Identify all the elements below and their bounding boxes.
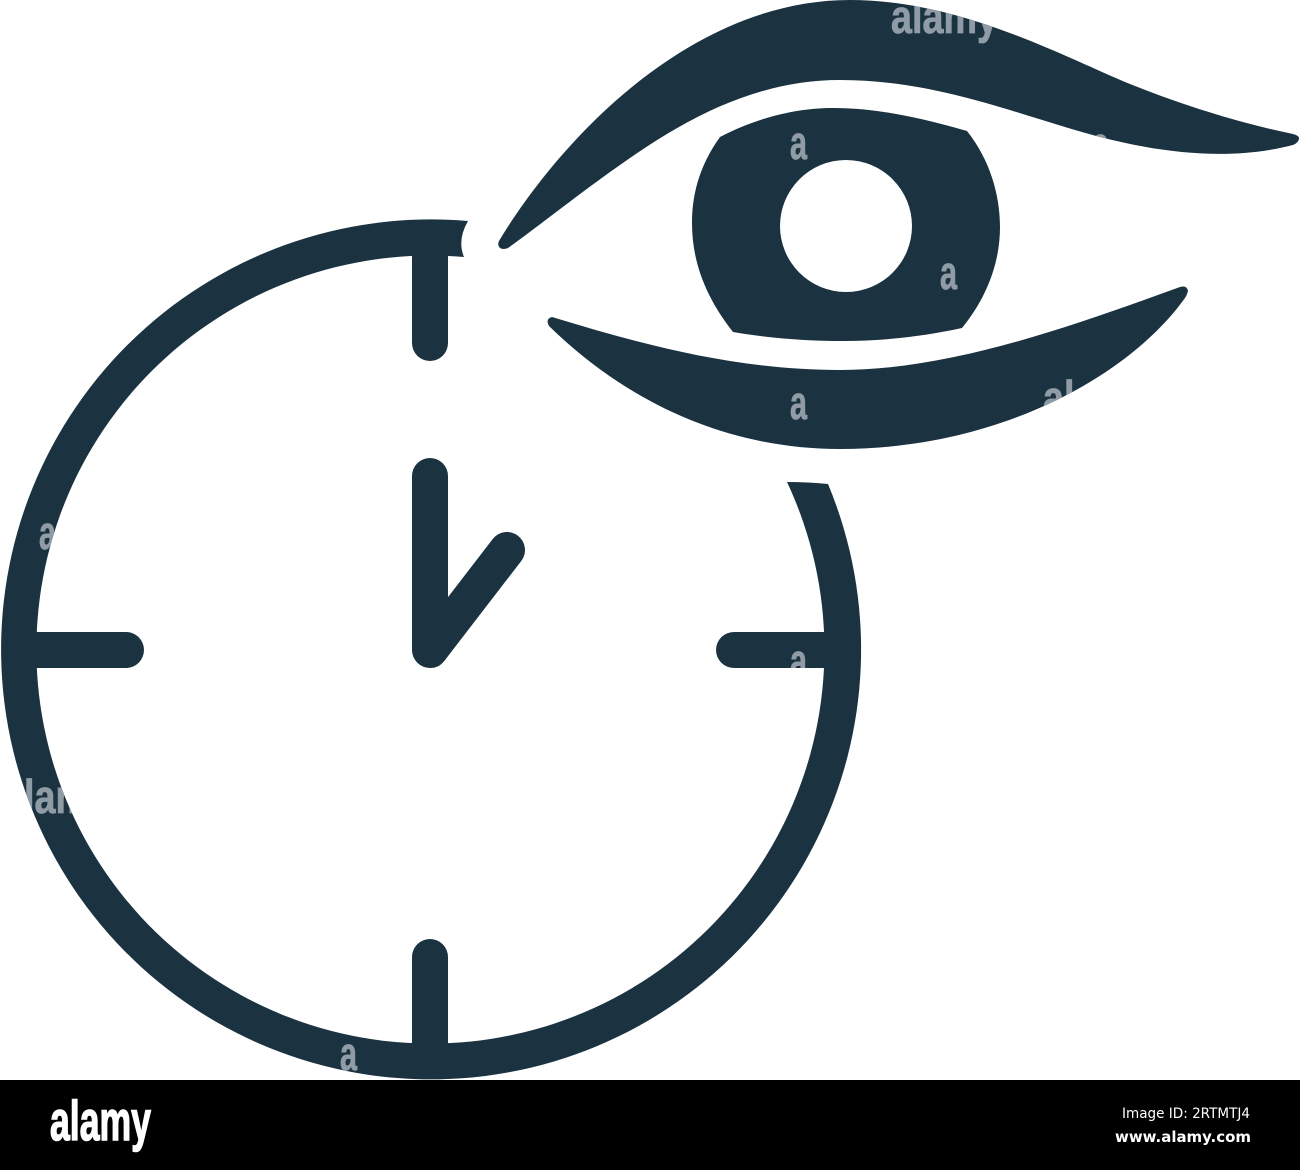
iris and pupil [692, 108, 1000, 341]
watermarks: a [790, 116, 808, 169]
clock hands [430, 476, 507, 650]
website: www.alamy.com [1115, 1128, 1251, 1146]
alamy logo: alamy [50, 1089, 151, 1152]
watermarks: a [1092, 117, 1110, 170]
watermarks: a [940, 246, 958, 299]
watermarks: a [790, 634, 808, 687]
eyebrow [498, 0, 1299, 249]
image id: Image ID: 2RTMTJ4 [1122, 1106, 1250, 1122]
watermarks: a [39, 506, 57, 559]
footer bar [0, 1080, 1300, 1170]
watermarks: a [340, 1027, 358, 1080]
watermarks: a [790, 376, 808, 429]
watermarks: alamy [3, 770, 110, 823]
clock tick: twelve [412, 245, 448, 343]
lower eyelid [548, 286, 1188, 449]
clock ring [1, 219, 861, 1079]
clock tick: three [734, 632, 835, 668]
icon: eye [498, 0, 1299, 449]
clock tick: six [412, 957, 448, 1055]
watermarks: alamy [1043, 371, 1150, 424]
clock tick: nine [25, 632, 126, 668]
icon: clock [1, 219, 861, 1079]
